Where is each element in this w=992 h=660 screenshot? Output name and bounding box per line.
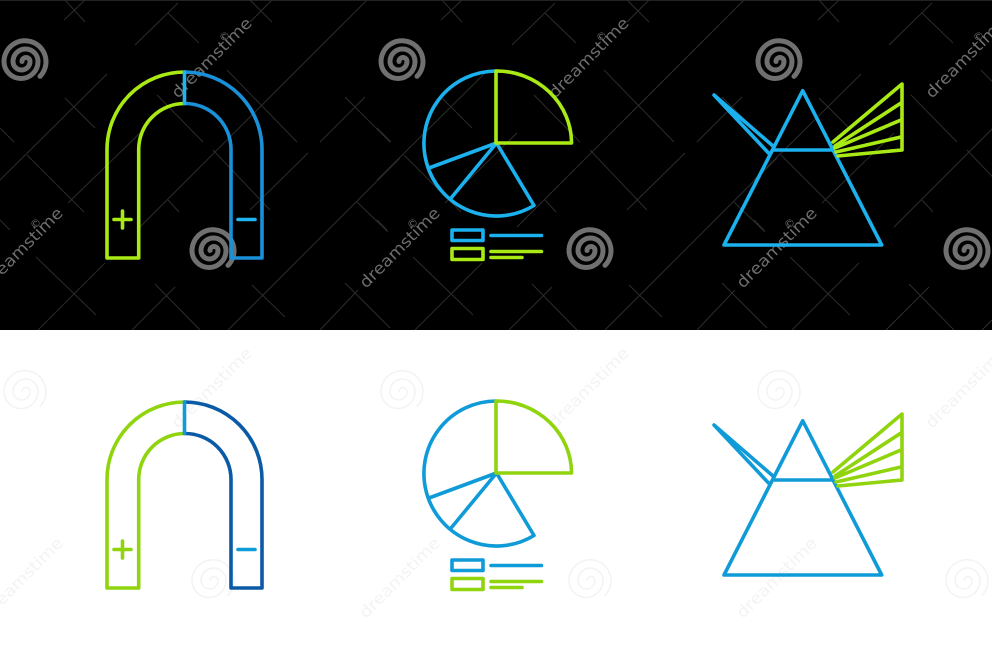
panel: black top half: dreamstime	[167, 13, 256, 102]
icon: pie chart on black	[424, 71, 572, 260]
panel: black top half: ©	[30, 217, 41, 230]
icon: prism with light rays on white	[714, 414, 902, 575]
icon: horseshoe magnet on black	[107, 72, 262, 258]
panel: white bottom half: dreamstime	[544, 343, 633, 432]
icon: horseshoe magnet on white	[107, 402, 262, 588]
panel: black top half: dreamstime	[355, 203, 444, 292]
panel: black top half: ©	[219, 30, 230, 43]
panel: white bottom half: dreamstime	[355, 533, 444, 622]
panel: black top half	[0, 0, 992, 330]
panel: black top half: ©	[784, 217, 795, 230]
panel: black top half: dreamstime	[544, 13, 633, 102]
panel: white bottom half: dreamstime	[167, 343, 256, 432]
icon: pie chart on white	[424, 401, 572, 590]
panel: white bottom half	[0, 330, 992, 660]
icon: prism with light rays on black	[714, 84, 902, 245]
panel: black top half: ©	[973, 30, 984, 43]
panel: black top half: dreamstime	[732, 203, 821, 292]
panel: black top half: ©	[596, 30, 607, 43]
panel: white bottom half: dreamstime	[732, 533, 821, 622]
panel: black top half: ©	[407, 217, 418, 230]
